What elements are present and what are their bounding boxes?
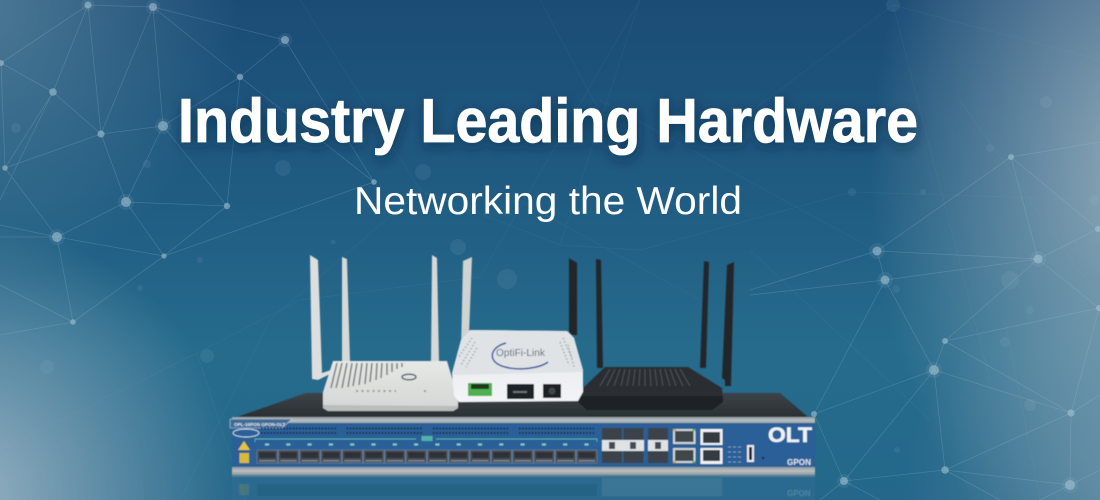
OLT chassis [230, 393, 815, 477]
uplink SFP cages [602, 428, 668, 464]
green terminal [468, 383, 492, 396]
brand mark [233, 429, 259, 437]
model tag [230, 419, 292, 428]
OLT reflection [232, 475, 815, 500]
vent slots [331, 363, 402, 388]
logo [402, 374, 416, 380]
USB port [747, 445, 754, 462]
LEDs [356, 390, 427, 392]
status LEDs [728, 447, 741, 462]
PON bracket [255, 436, 597, 442]
OLT reflection: GPON [787, 489, 811, 498]
side vent dots [458, 338, 574, 367]
OptiFi-Link logo: OptiFi-Link [496, 347, 546, 359]
subtitle: Networking the World [354, 180, 742, 223]
GPON label: GPON [787, 458, 811, 467]
ethernet port [507, 384, 534, 399]
hardware group [230, 255, 815, 500]
warning icons [238, 441, 250, 463]
antennas [310, 255, 332, 380]
PON ports [257, 450, 597, 463]
OptiFi-Link device [452, 330, 583, 402]
reset button [762, 457, 764, 459]
model tag: OPL-16PON GPON-OLT [234, 422, 285, 427]
port labels [265, 444, 597, 446]
power jack [543, 384, 561, 398]
vent ridges [600, 369, 690, 386]
body [323, 361, 458, 411]
vent holes [261, 428, 594, 433]
white router [310, 255, 472, 411]
black router [569, 258, 734, 410]
title: Industry Leading Hardware [178, 87, 918, 156]
RJ45 ports [673, 429, 722, 464]
OLT label: OLT [768, 424, 812, 447]
